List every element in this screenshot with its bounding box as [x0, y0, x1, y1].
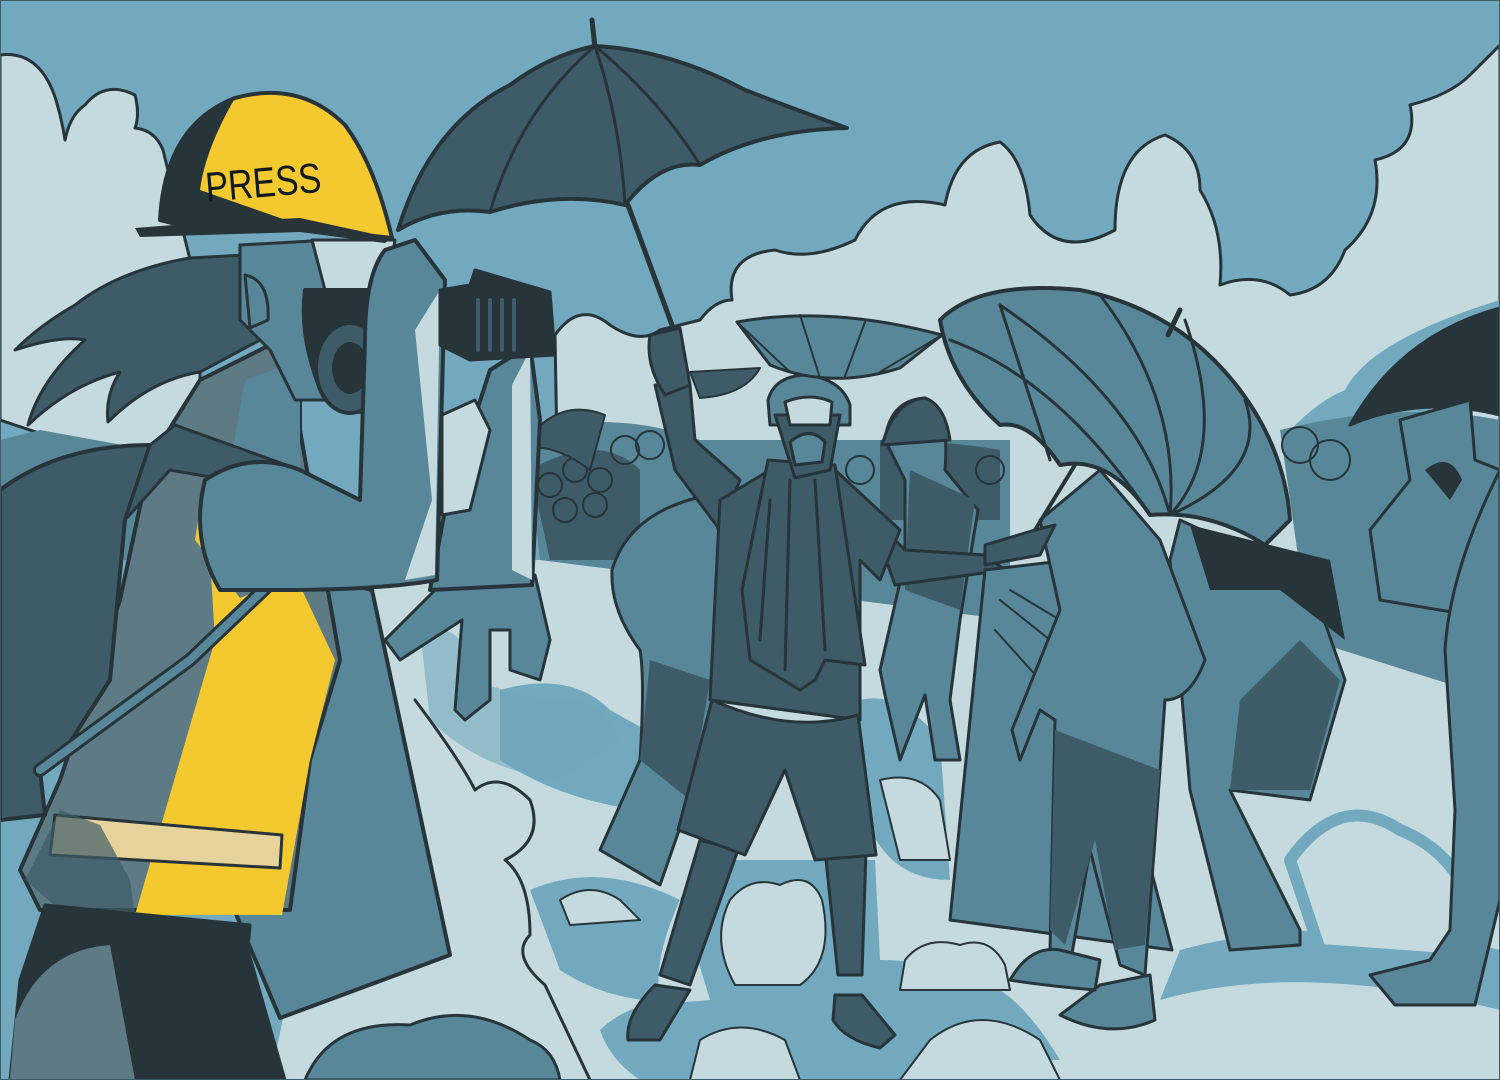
yellow shirt	[135, 475, 335, 915]
central protester: head	[775, 415, 840, 478]
cloud shadow, lower right sky	[1290, 300, 1500, 440]
inverted umbrella above central protester	[690, 315, 942, 398]
camera lens	[440, 270, 555, 360]
backpack	[0, 445, 150, 820]
small distant umbrella	[520, 410, 605, 470]
helmeted protester, back right of centre	[880, 398, 978, 760]
crowd seen between arms	[442, 400, 490, 515]
central protester: goggles	[785, 397, 832, 425]
photographer's protective sheet	[230, 570, 450, 1018]
tear gas clouds, left	[0, 55, 200, 460]
central protester: extended arm	[870, 515, 1005, 585]
head and ear	[240, 240, 345, 400]
press helmet	[160, 93, 392, 238]
bearded protester at right edge	[1370, 400, 1500, 1005]
large raised umbrella	[398, 20, 847, 325]
gas mask	[304, 290, 390, 412]
press label: PRESS	[203, 154, 323, 211]
face	[312, 240, 395, 300]
central protester: torso	[710, 470, 900, 720]
protester with backpack, left of centre	[600, 495, 735, 885]
central protester: raised arm	[655, 385, 740, 530]
central protester: shoes	[628, 985, 895, 1048]
rear arm	[430, 345, 540, 590]
shield behind bending protester	[950, 560, 1172, 950]
pants	[10, 905, 285, 1080]
central protester: fist	[649, 328, 690, 395]
reflective band	[50, 815, 282, 868]
front arm	[200, 240, 445, 590]
smoke mound, bottom left	[305, 1015, 560, 1080]
neck shading	[230, 360, 300, 470]
distant crowd	[0, 412, 1500, 700]
torso and vest	[20, 330, 340, 910]
central protester: legs	[660, 840, 866, 985]
distant legs behind the photographer	[385, 575, 550, 720]
central protester: gas mask	[790, 434, 825, 465]
protester bending over, back	[1170, 520, 1345, 950]
central protester: helmet	[768, 375, 850, 425]
ground smoke	[270, 560, 1500, 1080]
crowd heads	[538, 427, 1350, 522]
umbrella cropped at right edge	[1350, 308, 1500, 425]
open umbrella held to the right	[940, 288, 1290, 565]
protester bending over, front	[1010, 470, 1205, 1029]
small smoke puffs	[560, 778, 1060, 1080]
central protester	[628, 328, 1005, 1048]
helmet brim	[135, 218, 392, 243]
central protester: scarf	[742, 460, 865, 690]
tear gas clouds, centre and right	[555, 45, 1500, 620]
photographer	[0, 93, 555, 1080]
central protester: shorts	[678, 700, 876, 860]
hair	[15, 255, 260, 425]
